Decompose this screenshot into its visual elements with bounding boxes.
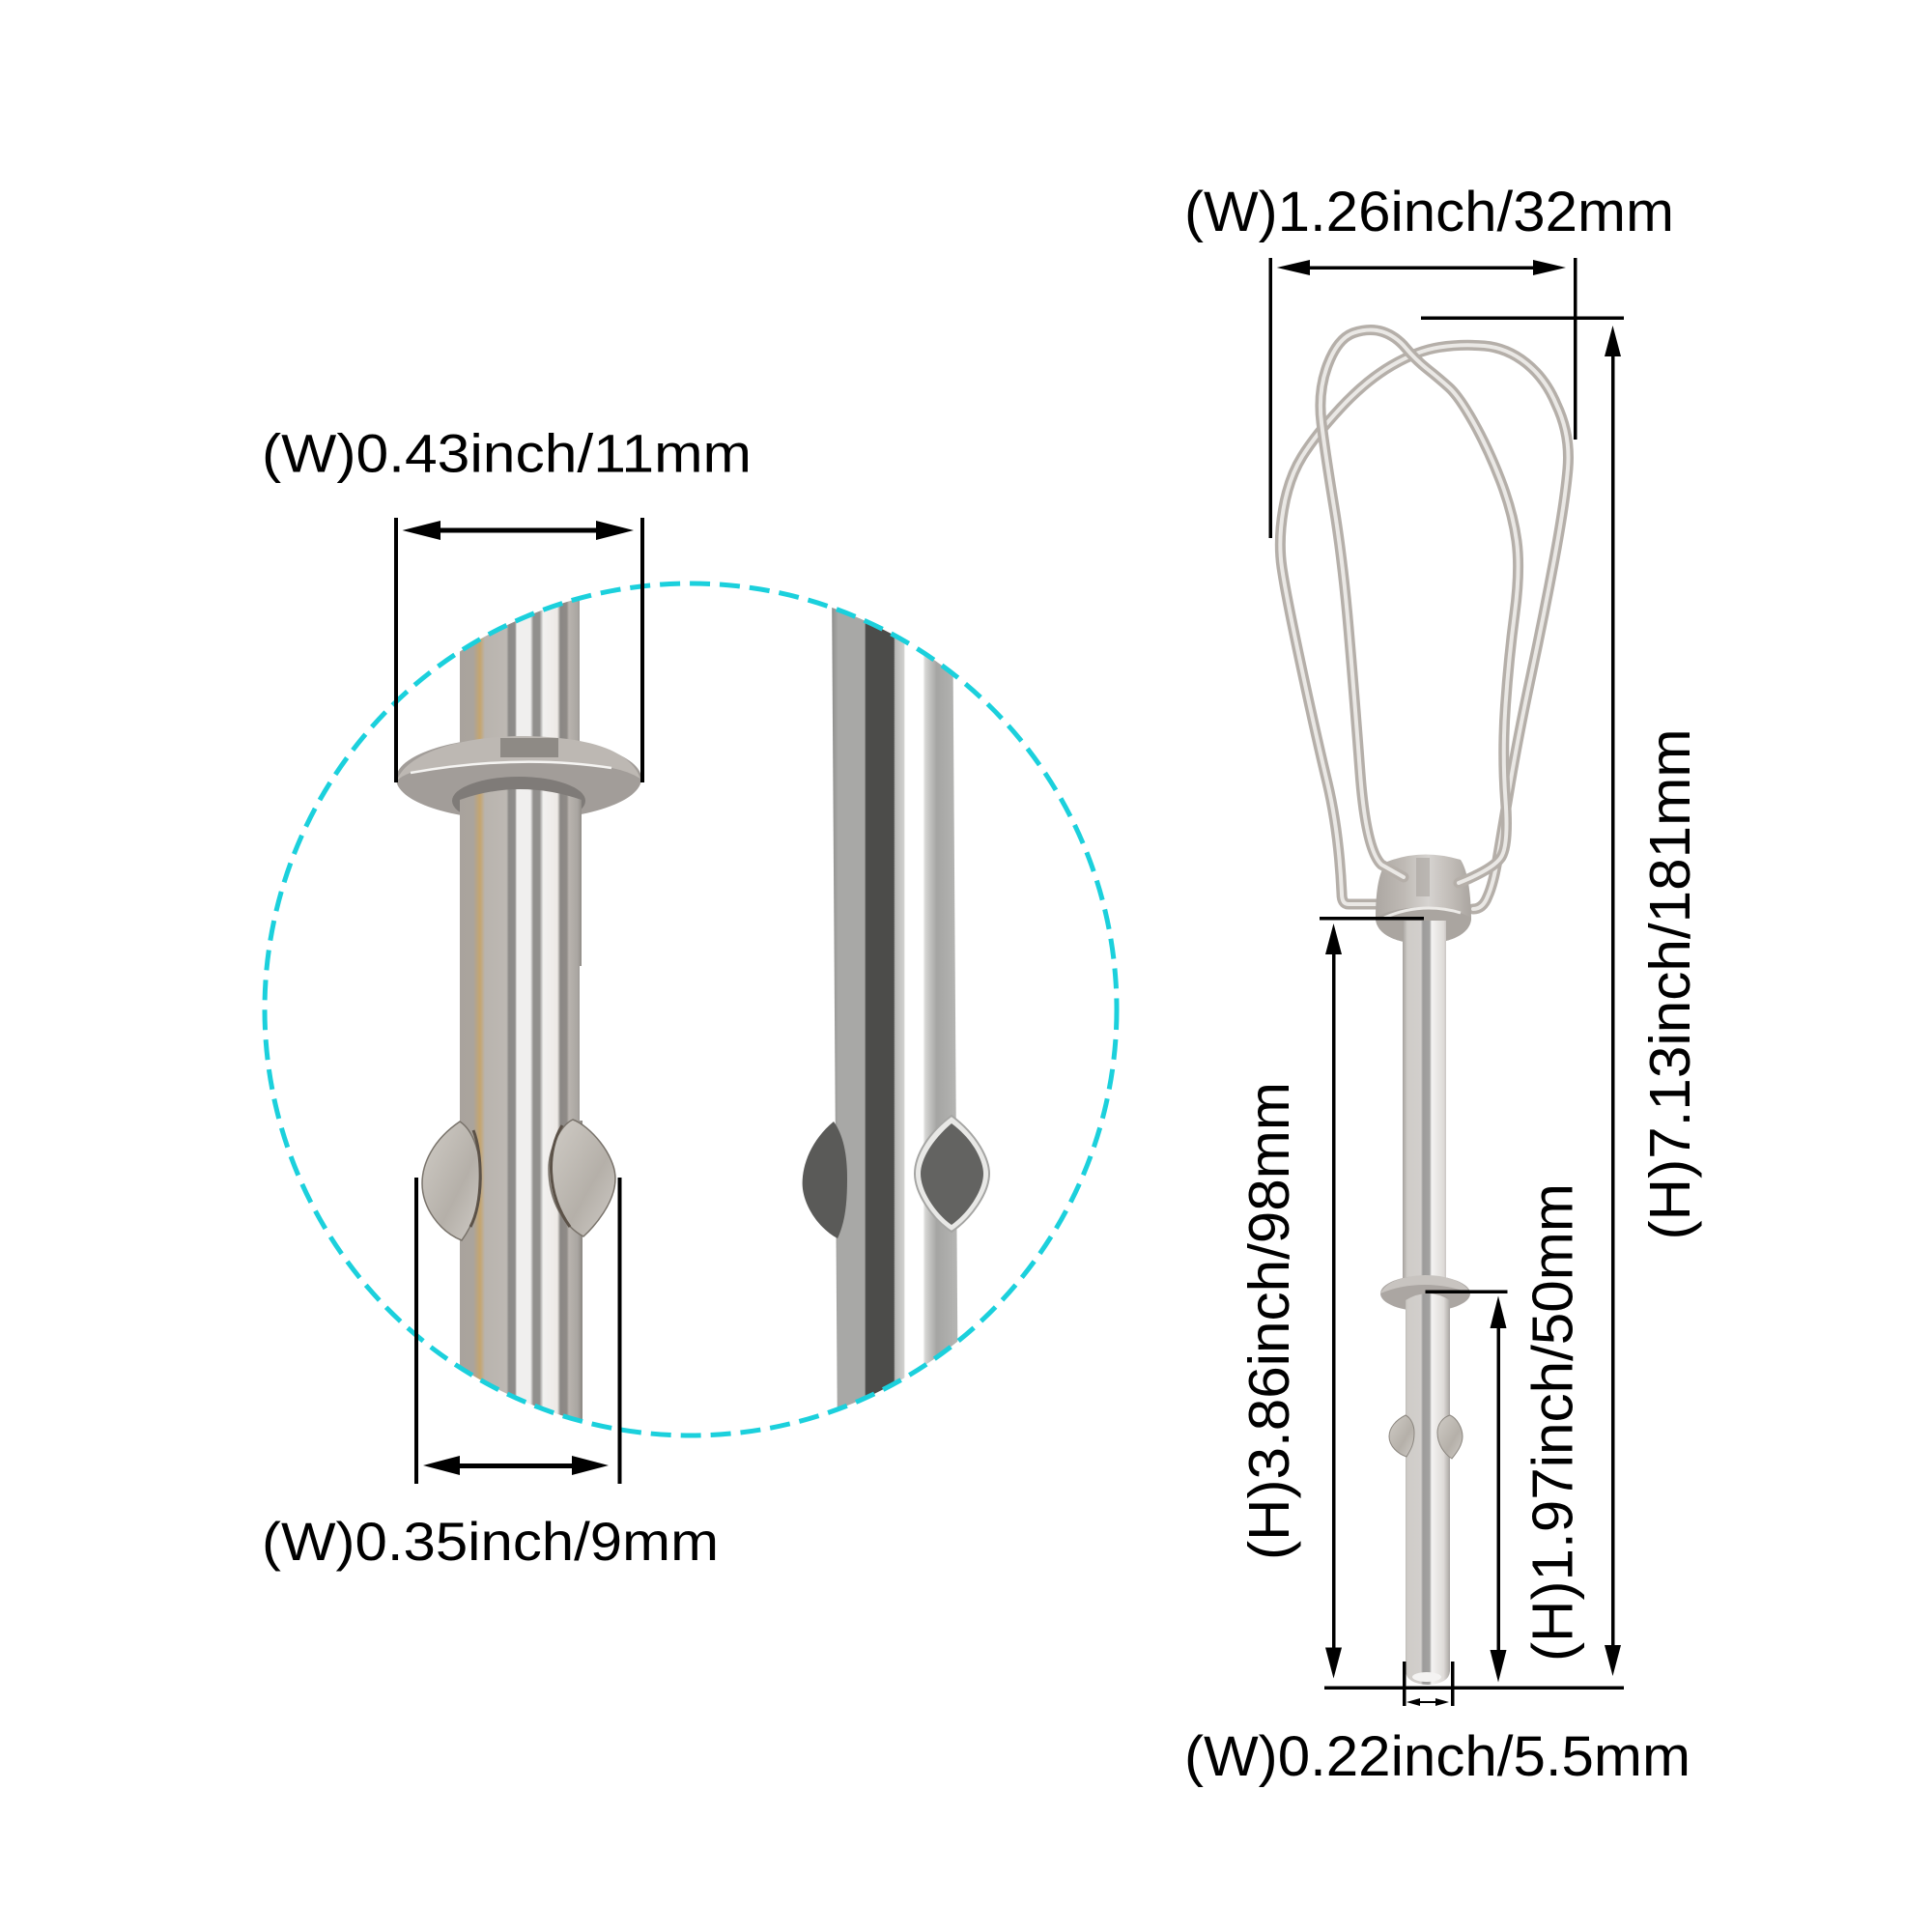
dashed circle [265, 583, 1117, 1435]
panel: zoomed detail circle [265, 580, 1117, 1449]
dimension: whisk width [1184, 181, 1674, 538]
flange [1380, 1275, 1470, 1352]
wire loop behind hub [1280, 345, 1569, 909]
label: (W)0.43inch/11mm [262, 423, 752, 483]
pin left dark [803, 1122, 847, 1238]
dimension: overall height [1324, 317, 1702, 1690]
dimension: shaft length [1237, 917, 1424, 1679]
photo: shaft front view [396, 580, 641, 1449]
dimension: pin span width [262, 1178, 719, 1572]
label: (W)0.22inch/5.5mm [1184, 1725, 1690, 1788]
hub [1376, 854, 1471, 944]
dimension: shaft diameter [1184, 1662, 1690, 1788]
shaft end [1412, 1672, 1441, 1682]
pin right dark [915, 1116, 989, 1232]
pin right [549, 1120, 615, 1236]
flange [396, 736, 641, 966]
label: (H)3.86inch/98mm [1237, 1082, 1301, 1560]
label: (W)1.26inch/32mm [1184, 181, 1674, 243]
label: (H)7.13inch/181mm [1638, 728, 1702, 1240]
pin left [422, 1122, 481, 1240]
label: (W)0.35inch/9mm [262, 1511, 719, 1572]
photo: shaft side view [803, 580, 989, 1449]
photo: whisk [1280, 329, 1569, 1685]
label: (H)1.97inch/50mm [1520, 1183, 1584, 1662]
wire loop front [1321, 329, 1519, 883]
pins [1389, 1415, 1463, 1459]
shaft [1403, 921, 1450, 1685]
dimension: flange width [262, 423, 752, 782]
dimension: flange to tip height [1426, 1183, 1584, 1683]
